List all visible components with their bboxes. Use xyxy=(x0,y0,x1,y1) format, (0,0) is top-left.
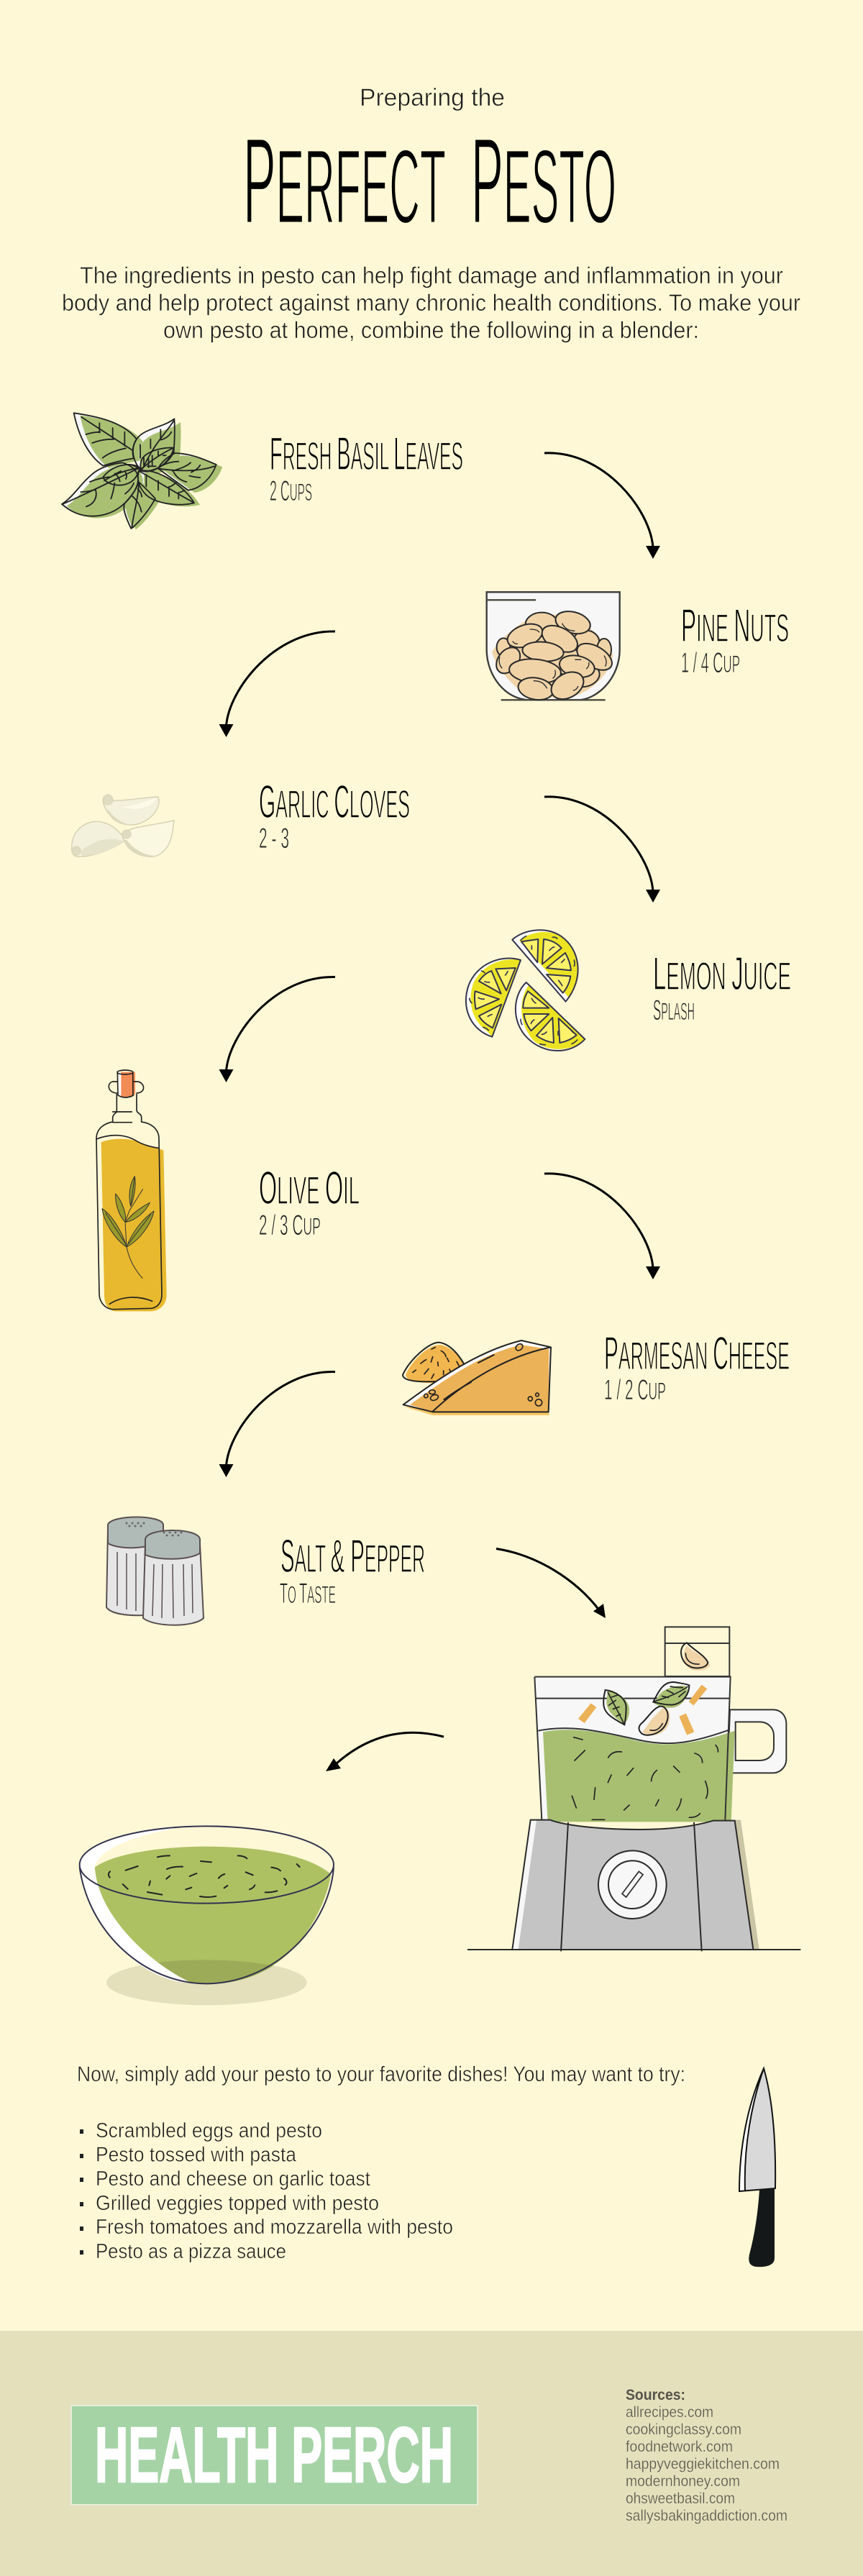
bullet list: Pesto and cheese on garlic toast xyxy=(96,2168,370,2191)
label: Pine Nuts, 1/4 Cup xyxy=(681,599,789,679)
label: Pine Nuts, 1/4 Cup: PINE NUTS xyxy=(681,599,789,652)
label: Lemon Juice, Splash xyxy=(653,947,791,1026)
subtitle: Preparing the: Preparing the xyxy=(360,84,505,111)
arrow 6 xyxy=(219,1372,335,1477)
sources list: Sources: xyxy=(626,2387,685,2403)
label: Garlic Cloves, 2 - 3 xyxy=(259,775,410,854)
intro text block: body and help protect against many chronic health conditions. To make your xyxy=(62,290,800,316)
label: Parmesan Cheese, 1/2 Cup: PARMESAN CHEESE xyxy=(604,1327,790,1379)
arrow 5 xyxy=(544,1174,660,1279)
label: Olive Oil, 2/3 Cup: 2 / 3 CUP xyxy=(259,1210,321,1241)
label: Salt and Pepper, To Taste xyxy=(280,1530,425,1609)
arrow 3 xyxy=(544,797,660,903)
arrow 7 xyxy=(496,1549,606,1618)
bullet list: Fresh tomatoes and mozzarella with pesto xyxy=(96,2216,453,2239)
icon: parmesan cheese xyxy=(403,1340,551,1415)
intro text block: own pesto at home, combine the following in a blender: xyxy=(163,317,699,343)
label: Olive Oil, 2/3 Cup xyxy=(259,1161,360,1241)
bullet list: Scrambled eggs and pesto xyxy=(96,2119,322,2142)
icon: garlic cloves xyxy=(72,795,174,857)
sources list: cookingclassy.com xyxy=(626,2421,741,2438)
label: Fresh Basil Leaves, 2 Cups: FRESH BASIL LEAVES xyxy=(270,427,463,480)
arrow 1 xyxy=(544,453,660,559)
arrow 8 xyxy=(326,1732,444,1771)
icon: salt and pepper shakers xyxy=(106,1517,204,1625)
bullet list: Grilled veggies topped with pesto xyxy=(96,2192,379,2215)
text: serving suggestions: Now, simply add your pesto to your favorite dishes! You may want to try: xyxy=(77,2063,685,2086)
label: Olive Oil, 2/3 Cup: OLIVE OIL xyxy=(259,1161,360,1214)
label: Parmesan Cheese, 1/2 Cup xyxy=(604,1327,790,1406)
sources list: allrecipes.com xyxy=(626,2404,713,2421)
label: Fresh Basil Leaves, 2 Cups: 2 CUPS xyxy=(270,475,312,507)
icon: bowl of pesto xyxy=(80,1826,334,2005)
label: Lemon Juice, Splash: SPLASH xyxy=(653,995,695,1026)
icon: lemon wedges xyxy=(466,930,585,1051)
icon: olive oil bottle xyxy=(96,1070,167,1311)
bullet list: Pesto tossed with pasta xyxy=(96,2143,297,2166)
arrow 4 xyxy=(219,977,335,1082)
bullet list xyxy=(80,2119,453,2263)
bullet list: Pesto as a pizza sauce xyxy=(96,2240,286,2263)
arrow 2 xyxy=(219,631,335,737)
icon: chef knife xyxy=(739,2068,775,2267)
label: Salt and Pepper, To Taste: TO TASTE xyxy=(280,1578,336,1609)
icon: basil leaves xyxy=(62,413,222,529)
footer band xyxy=(0,2331,863,2576)
sources list: foodnetwork.com xyxy=(626,2439,733,2455)
sources list: happyveggiekitchen.com xyxy=(626,2456,780,2472)
sources list xyxy=(626,2387,787,2524)
sources list: sallysbakingaddiction.com xyxy=(626,2508,787,2524)
text: PESTO xyxy=(471,113,616,250)
label: Garlic Cloves, 2 - 3: GARLIC CLOVES xyxy=(259,775,410,828)
icon: bowl of pine nuts xyxy=(487,592,620,705)
intro text block: The ingredients in pesto can help fight damage and inflammation in your xyxy=(80,262,783,288)
logo: Health Perch xyxy=(71,2406,478,2505)
label: Pine Nuts, 1/4 Cup: 1 / 4 CUP xyxy=(681,647,740,679)
label: Salt and Pepper, To Taste: SALT & PEPPER xyxy=(280,1530,425,1582)
text: serving suggestions xyxy=(77,2063,685,2263)
icon: blender xyxy=(467,1627,800,1951)
label: Parmesan Cheese, 1/2 Cup: 1 / 2 CUP xyxy=(604,1374,666,1406)
intro text block xyxy=(62,262,800,343)
title: Perfect Pesto: PERFECT xyxy=(243,113,446,250)
sources list: modernhoney.com xyxy=(626,2473,740,2490)
logo: Health Perch: HEALTH PERCH xyxy=(95,2411,453,2499)
label: Lemon Juice, Splash: LEMON JUICE xyxy=(653,947,791,1000)
label: Fresh Basil Leaves, 2 Cups xyxy=(270,427,463,507)
sources list: ohsweetbasil.com xyxy=(626,2490,735,2507)
label: Garlic Cloves, 2 - 3: 2 - 3 xyxy=(259,823,289,854)
